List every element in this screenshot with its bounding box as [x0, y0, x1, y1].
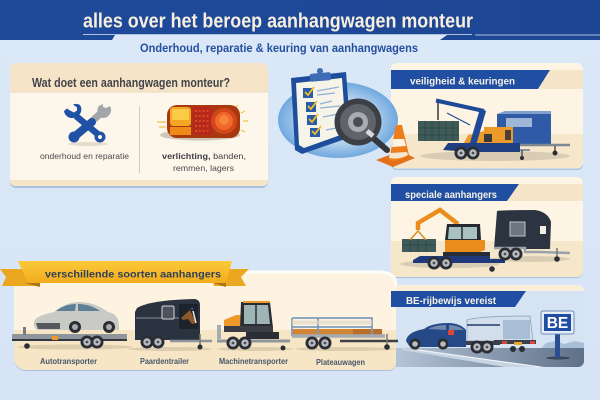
illustration: excavator and enclosed trailer	[400, 210, 570, 272]
ribbon heading: BE-rijbewijs vereist: BE-rijbewijs vereist	[406, 295, 496, 307]
panel: wat doet een aanhangwagen monteur	[10, 63, 268, 188]
icon: tail light	[157, 105, 248, 140]
icon: brake disc magnifier	[334, 98, 387, 150]
sign: BE	[541, 311, 574, 360]
label: plateauwagen: Plateauwagen	[316, 358, 365, 367]
panel heading: Wat doet een aanhangwagen monteur?	[32, 76, 230, 90]
illustration: car with enclosed trailer	[406, 316, 536, 354]
icon: traffic cone	[376, 125, 415, 167]
caption: onderhoud en reparatie: onderhoud en reparatie	[40, 152, 130, 161]
trailer: autotransporter	[12, 302, 133, 350]
illustration: crane trailer and container	[418, 100, 570, 161]
ribbon heading: BE-rijbewijs vereist	[391, 291, 526, 307]
header band	[0, 0, 600, 40]
banner heading	[0, 261, 249, 287]
road scene	[391, 341, 584, 367]
icon: crossed wrenches	[64, 104, 111, 146]
ribbon heading: speciale aanhangers	[405, 189, 497, 201]
panel: veiligheid & keuringen	[391, 63, 583, 170]
caption: verlichting, banden, remmen, lagers	[162, 151, 246, 173]
panel: BE-rijbewijs vereist	[391, 285, 584, 367]
caption: verlichting, banden, remmen, lagers: remmen, lagers	[173, 163, 234, 173]
subtitle: Onderhoud, reparatie & keuring van aanhangwagens	[140, 41, 418, 55]
ribbon heading: veiligheid & keuringen	[410, 76, 515, 88]
trailer: machinetransporter	[217, 301, 293, 351]
ribbon heading	[391, 70, 550, 89]
label: machinetransporter: Machinetransporter	[219, 357, 288, 366]
title: alles over het beroep aanhangwagen monteur	[83, 10, 473, 32]
caption: verlichting, banden, remmen, lagers: verlichting, banden,	[162, 151, 246, 161]
trailer: plateauwagen	[292, 318, 398, 351]
icon: clipboard	[291, 68, 351, 154]
sign: BE: BE	[547, 315, 568, 332]
label: autotransporter: Autotransporter	[40, 357, 97, 366]
panel: verschillende soorten aanhangers	[0, 261, 398, 371]
panel: speciale aanhangers	[391, 177, 583, 278]
illustration: inspection clipboard, brake disc and cone	[278, 68, 415, 167]
label: paardentrailer: Paardentrailer	[140, 357, 189, 366]
trailer: paardentrailer	[128, 299, 212, 351]
ribbon heading	[391, 184, 519, 201]
banner heading: verschillende soorten aanhangers	[45, 268, 221, 280]
